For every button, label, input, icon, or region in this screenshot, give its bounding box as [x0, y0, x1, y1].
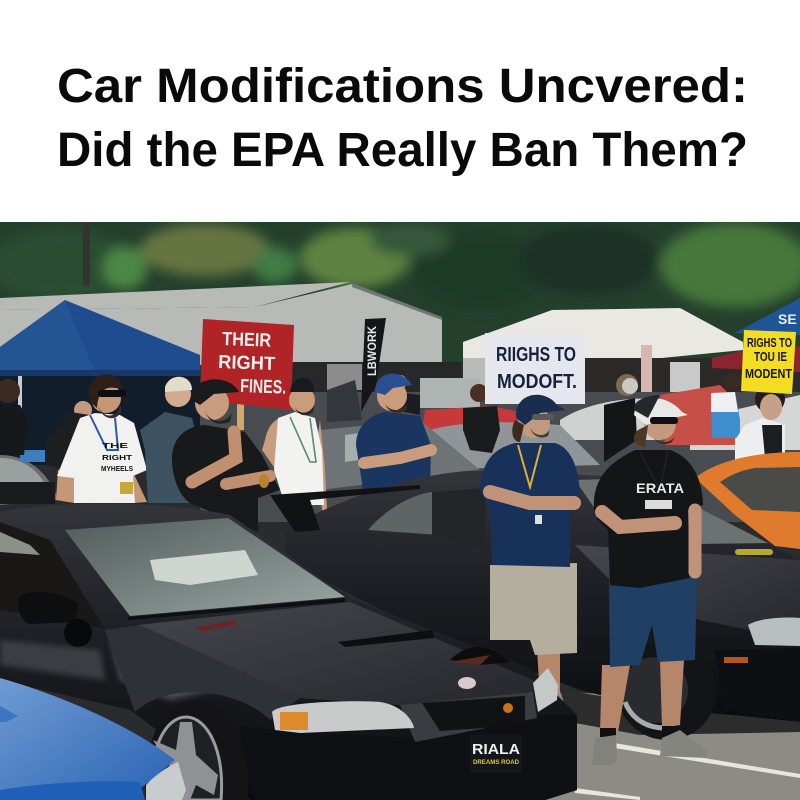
hood	[138, 602, 533, 705]
side panel reflections	[0, 640, 215, 700]
person: man in background cap	[398, 375, 420, 415]
background parked cars	[0, 378, 800, 522]
license plate: RIALA	[472, 741, 520, 758]
person: back view bald	[45, 401, 92, 470]
man: navy tee and khaki shorts	[480, 395, 580, 695]
person: woman in black	[463, 384, 500, 453]
white event tent	[463, 308, 743, 398]
person: dark jacket centre	[327, 380, 362, 422]
person: black cap black tee, hand on chin	[172, 379, 280, 532]
side window	[0, 522, 104, 628]
front wheel	[145, 700, 248, 800]
background crowd	[0, 374, 785, 470]
person: white sleeveless	[262, 378, 327, 510]
sign: rights to modoft: MODOFT.	[497, 371, 577, 393]
sign: yellow	[741, 330, 796, 394]
sign: their right fines: THEIR	[222, 329, 272, 352]
license plate	[470, 735, 522, 773]
title: Did the EPA Really Ban Them?	[57, 124, 748, 177]
sign: their right fines: FINES.	[240, 376, 287, 399]
right headlight	[533, 668, 558, 712]
lamp pole	[83, 222, 90, 286]
person: photographer in black	[604, 374, 638, 462]
tree line	[0, 222, 800, 372]
mirror	[18, 592, 78, 624]
blue tent	[0, 300, 200, 465]
blue right tent: SE	[778, 311, 797, 327]
crossed arms	[192, 432, 270, 484]
person: white tee with sunglasses: MYHEELS	[101, 466, 133, 473]
banner flag: LBWORK	[365, 326, 379, 376]
sign: their right fines: RIGHT	[218, 352, 276, 375]
person: white tee with sunglasses	[56, 374, 147, 503]
red canopy right	[712, 346, 800, 372]
right headlight	[748, 618, 800, 646]
badge	[458, 677, 476, 689]
windshield	[65, 518, 345, 616]
man: black tee and navy shorts: ERATA	[636, 480, 684, 496]
spoiler	[270, 485, 420, 532]
person: white tee with sunglasses: RIGHT	[102, 455, 133, 462]
orange car	[695, 452, 800, 549]
foreground black car	[0, 504, 577, 800]
banner flag	[361, 318, 386, 412]
bumper	[238, 715, 577, 800]
person: white cap blue tee	[140, 377, 197, 503]
sign: rights to modoft	[485, 333, 585, 404]
headlight	[272, 701, 414, 733]
person: white tee with sunglasses: THE	[102, 443, 129, 450]
sign: rights to modoft: RIIGHS TO	[496, 344, 576, 366]
grille	[422, 696, 525, 731]
photo	[0, 222, 800, 800]
person: far left in black	[0, 379, 28, 455]
person: white hoodie	[735, 385, 785, 460]
blue right tent	[735, 298, 800, 335]
shoes	[592, 735, 617, 765]
sign: yellow: TOU IE	[754, 349, 787, 364]
sign: yellow: MODENT	[745, 366, 792, 381]
person: white and blue shirt	[711, 374, 740, 438]
warehouse	[0, 282, 462, 392]
sign: their right fines	[200, 319, 294, 430]
title: Car Modifications Uncvered:	[57, 60, 748, 113]
black mid car	[270, 470, 800, 740]
license plate: DREAMS ROAD	[473, 760, 520, 766]
person: navy tee blue cap	[356, 374, 431, 503]
fender	[105, 625, 300, 720]
blue foreground car	[0, 678, 186, 800]
man: black tee and navy shorts	[592, 395, 708, 765]
title	[0, 0, 800, 222]
photo base	[0, 372, 800, 800]
rear wheel of mid car	[622, 657, 712, 740]
ground	[546, 692, 800, 800]
